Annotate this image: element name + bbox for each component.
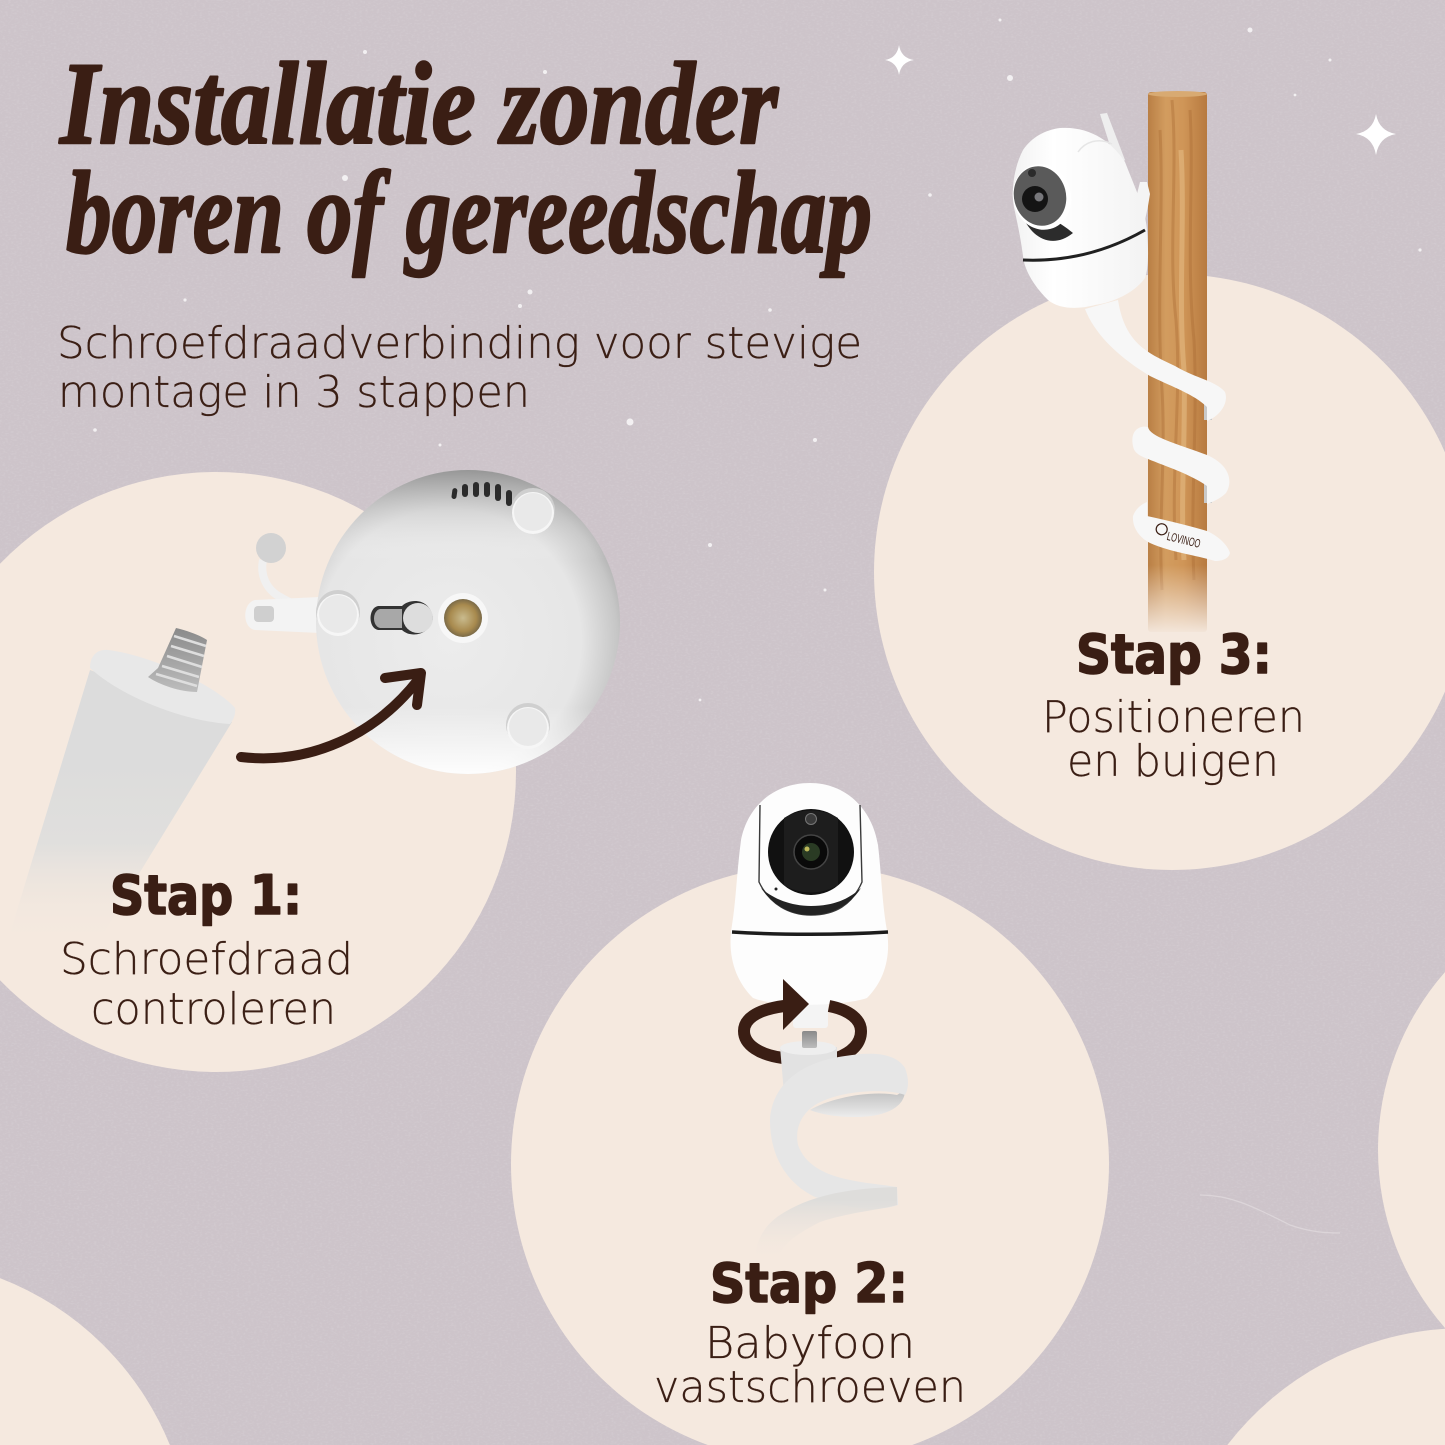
flexible spring arm <box>755 1031 908 1262</box>
step 3 description <box>1042 692 1305 787</box>
step 2 label: Stap 2: <box>710 1252 908 1315</box>
camera back view <box>245 470 620 774</box>
star sparkle top <box>885 45 914 75</box>
panel: step 2 <box>511 783 1109 1445</box>
keyhole slot <box>370 601 433 634</box>
subtitle <box>57 318 862 418</box>
step 3 description: en buigen <box>1067 736 1279 787</box>
title <box>58 38 872 278</box>
brand logo on strap: LOVINOO <box>1166 529 1202 551</box>
step 1 description: controleren <box>91 984 336 1035</box>
step 1 description: Schroefdraad <box>60 934 353 985</box>
step 1 description <box>60 934 353 1035</box>
star sparkle right <box>1356 114 1396 155</box>
title: boren of gereedschap <box>66 147 872 278</box>
step 2 description: vastschroeven <box>654 1362 966 1413</box>
step 2 description: Babyfoon <box>705 1318 915 1369</box>
wooden pole <box>1146 91 1209 635</box>
rotate arrow back part <box>744 979 861 1058</box>
circle: right edge decoration <box>1378 972 1445 1328</box>
flexible arm wrapped on pole <box>1085 300 1230 561</box>
step 3 label: Stap 3: <box>1076 623 1272 686</box>
title: Installatie zonder <box>58 38 779 169</box>
brass screw socket <box>438 593 488 643</box>
antenna cable and connector <box>245 533 320 633</box>
threaded stem <box>8 628 235 940</box>
step 3 description: Positioneren <box>1042 692 1305 743</box>
panel: step 1 <box>0 470 620 1072</box>
front camera <box>731 783 888 1028</box>
rubber feet <box>316 488 555 749</box>
arrow to socket <box>241 673 421 758</box>
camera on pole <box>1005 113 1150 308</box>
circle: bottom left decoration <box>0 1278 170 1445</box>
step 1 label: Stap 1: <box>110 864 302 927</box>
brand logo on strap <box>1153 523 1203 551</box>
circle: bottom right decoration <box>1227 1329 1445 1445</box>
subtitle: Schroefdraadverbinding voor stevige <box>57 318 862 369</box>
vents <box>451 482 512 506</box>
step 2 description <box>654 1318 966 1413</box>
subtitle: montage in 3 stappen <box>58 367 530 418</box>
panel: step 3 <box>874 91 1445 870</box>
